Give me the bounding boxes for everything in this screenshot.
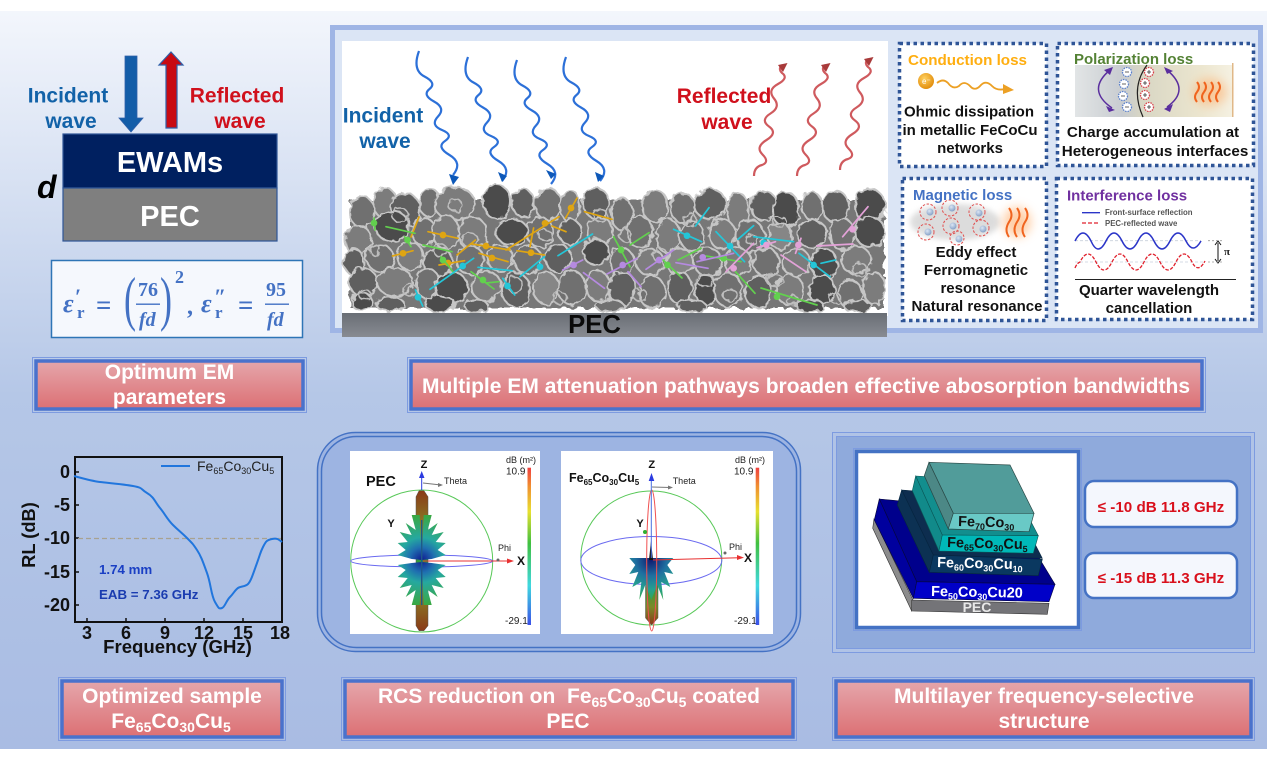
arrow: incident xyxy=(119,56,143,132)
multilayer image: 30 xyxy=(993,543,1003,553)
Fe50 layer xyxy=(874,499,1055,602)
Fe70 layer xyxy=(924,462,1034,532)
x axis labels: 18 xyxy=(270,623,290,643)
section title: RCS reduction: 5 xyxy=(679,694,687,710)
multilayer image: Co xyxy=(985,515,1005,531)
section title: multilayer structure: Multilayer frequency-selective xyxy=(894,685,1194,708)
box: conduction loss: networks xyxy=(937,140,1003,157)
box: magnetic loss: Ferromagnetic xyxy=(924,262,1028,279)
box: conduction loss: in metallic FeCoCu xyxy=(902,122,1038,139)
callout: -15 dB bandwidth xyxy=(1085,553,1237,598)
formula box: 2 xyxy=(175,267,184,287)
RCS plot: PEC xyxy=(350,451,540,634)
multilayer image: Cu xyxy=(993,556,1013,573)
section title: optimized sample: Optimized sample xyxy=(82,685,262,708)
section title: RCS reduction xyxy=(342,678,796,740)
box: interference loss: Quarter wavelength xyxy=(1079,282,1219,299)
multilayer image: 30 xyxy=(1004,522,1014,532)
RCS plot: coated: X xyxy=(744,551,752,565)
RCS plot: coated xyxy=(561,451,773,634)
section title: optimized sample: Fe xyxy=(111,710,231,735)
RCS plot: coated: -29.1 xyxy=(734,616,757,627)
formula box: r xyxy=(215,303,223,322)
section title: RCS reduction: 65 xyxy=(592,694,607,710)
box: interference loss: cancellation xyxy=(1106,300,1192,317)
layer: PEC xyxy=(63,188,277,241)
section title: RCS reduction: 30 xyxy=(635,694,651,710)
panel: multilayer structure xyxy=(832,432,1254,652)
panel: attenuation pathways xyxy=(332,28,1260,339)
section title: optimized sample: 65 xyxy=(136,719,152,735)
label: incident wave: Incident xyxy=(28,84,108,108)
y axis title: RL (dB) xyxy=(18,502,39,568)
EWAMs text: EWAMs xyxy=(117,147,223,179)
formula box: r xyxy=(77,303,85,322)
formula box: = xyxy=(238,290,253,320)
thickness note: 1.74 mm xyxy=(99,562,152,577)
section title: RCS reduction: RCS reduction on Fe xyxy=(378,685,760,710)
RCS plot: PEC: -29.1 xyxy=(505,616,528,627)
threshold line xyxy=(78,538,281,540)
callout: -10 dB bandwidth xyxy=(1085,481,1237,527)
legend: 30 xyxy=(241,466,251,476)
legend: Co xyxy=(223,458,241,474)
legend xyxy=(1082,208,1193,228)
section title: RCS reduction: PEC xyxy=(546,710,590,733)
label: reflected wave: wave xyxy=(213,110,266,133)
RCS plot: PEC: dB (m²) xyxy=(506,455,536,465)
x axis labels: 6 xyxy=(121,623,131,643)
label: incident wave: wave xyxy=(44,110,97,133)
legend: PEC-reflected wave xyxy=(1105,219,1178,228)
x axis labels: 15 xyxy=(233,623,253,643)
RCS plot: coated: 65 xyxy=(584,478,593,487)
RCS plot: coated: Y xyxy=(636,518,644,530)
x axis labels: 3 xyxy=(82,623,92,643)
label: incident wave: Incident xyxy=(343,104,423,128)
legend: 65 xyxy=(213,466,223,476)
RCS plot: coated: Phi xyxy=(729,542,742,552)
y axis labels: -5 xyxy=(54,495,70,515)
interference waves xyxy=(1075,233,1236,280)
x axis labels: 12 xyxy=(194,623,214,643)
multilayer image: Cu xyxy=(1003,536,1023,553)
label: reflected wave: wave xyxy=(700,111,753,134)
legend: Fe xyxy=(197,458,213,474)
section title: optimized sample: 30 xyxy=(179,719,195,735)
box: interference loss: π xyxy=(1224,246,1230,258)
box: polarization loss: Heterogeneous interfaces xyxy=(1062,143,1248,160)
RCS plot: coated: 30 xyxy=(609,478,619,487)
y axis labels: -10 xyxy=(44,528,70,548)
icon: electron wave xyxy=(918,73,1014,94)
layer: EWAMs xyxy=(63,134,277,188)
EAB note: EAB = 7.36 GHz xyxy=(99,587,199,602)
multilayer image: 10 xyxy=(1012,564,1023,574)
formula box: fd xyxy=(267,309,285,331)
formula box: , xyxy=(187,294,193,320)
magnetic image xyxy=(910,200,1031,245)
polarization image xyxy=(1075,63,1234,117)
RCS plot: coated: Fe xyxy=(569,471,584,485)
section title: RCS reduction: Co xyxy=(607,685,635,708)
chart: reflection loss xyxy=(18,457,290,657)
multilayer image: Co xyxy=(974,536,994,552)
multilayer image: Fe xyxy=(931,584,948,600)
multilayer image: 30 xyxy=(977,592,987,602)
box: interference loss xyxy=(1056,178,1252,320)
section title: multiple EM attenuation pathways xyxy=(408,358,1206,412)
y axis labels: -20 xyxy=(44,595,70,615)
RL curve xyxy=(74,476,282,608)
magnetic and conductive rods xyxy=(372,198,868,306)
y axis labels: 0 xyxy=(60,462,70,482)
formula box: 95 xyxy=(266,279,286,301)
thickness label d: d xyxy=(37,169,58,205)
white scene background xyxy=(342,41,888,316)
formula box: ( xyxy=(124,266,136,332)
box: magnetic loss xyxy=(902,178,1046,320)
section title: RCS reduction: coated xyxy=(686,685,760,708)
legend xyxy=(161,458,274,476)
box: polarization loss xyxy=(1058,44,1254,166)
label: reflected wave: Reflected xyxy=(190,84,284,108)
RCS plot: coated: Theta xyxy=(673,476,696,486)
multilayer image: Co xyxy=(964,556,984,572)
RCS plot: PEC: Z xyxy=(421,459,428,471)
section title: optimum EM parameters: parameters xyxy=(113,386,226,409)
multilayer image: 60 xyxy=(954,562,964,573)
multilayer image xyxy=(854,448,1082,630)
RCS plot: PEC: Theta xyxy=(444,476,467,486)
RCS plot: PEC: Phi xyxy=(498,543,511,553)
section title: RCS reduction: Cu xyxy=(651,685,679,708)
formula box: ) xyxy=(160,266,172,332)
multilayer image: 30 xyxy=(983,563,993,573)
formula box: 76 xyxy=(138,279,158,301)
RCS plot: PEC: PEC xyxy=(366,474,396,490)
multilayer image: Cu20 xyxy=(987,585,1023,602)
multilayer image: Fe xyxy=(937,555,954,571)
panel: RCS simulation xyxy=(318,432,800,652)
multilayer image: Fe xyxy=(958,514,975,530)
label: reflected wave: Reflected xyxy=(677,85,771,108)
callout: -15 dB bandwidth: ≤ -15 dB 11.3 GHz xyxy=(1098,570,1225,587)
Fe60 layer xyxy=(897,490,1042,576)
box: conduction loss: Conduction loss xyxy=(908,52,1027,69)
section title: optimized sample xyxy=(58,678,286,740)
RCS plot: PEC: Y xyxy=(387,518,395,530)
multilayer image: PEC xyxy=(963,599,991,615)
RCS plot: coated: Co xyxy=(592,471,610,485)
reflected wave squiggles xyxy=(754,57,874,176)
RCS plot: coated: 10.9 xyxy=(734,466,754,477)
RCS plot: PEC: X xyxy=(517,554,525,568)
legend: 5 xyxy=(269,466,274,476)
RCS plot: PEC: 10.9 xyxy=(506,466,526,477)
PEC label: PEC xyxy=(568,311,621,339)
icon: electron wave: e⁻ xyxy=(922,77,931,86)
multilayer image: 65 xyxy=(964,542,974,553)
formula box: ″ xyxy=(214,284,226,309)
formula box: ′ xyxy=(75,284,81,309)
section title: multiple EM attenuation pathways: Multiple EM attenuation pathways broaden effective abosorption bandwidths xyxy=(422,375,1190,398)
multilayer image: Fe xyxy=(947,535,964,551)
PEC layer xyxy=(873,519,1049,614)
incident wave squiggles xyxy=(416,51,604,185)
box: magnetic loss: Eddy effect xyxy=(936,244,1016,261)
multilayer image: 5 xyxy=(1022,544,1028,554)
box: polarization loss: Charge accumulation at xyxy=(1067,124,1239,141)
callout: -10 dB bandwidth: ≤ -10 dB 11.8 GHz xyxy=(1098,499,1225,516)
multilayer image: 70 xyxy=(975,521,985,532)
section title: optimum EM parameters: Optimum EM xyxy=(105,361,234,384)
multilayer image: 50 xyxy=(948,591,958,601)
y axis labels: -15 xyxy=(44,562,70,582)
legend: Front-surface reflection xyxy=(1105,208,1193,217)
box: interference loss: Interference loss xyxy=(1067,188,1187,205)
formula box: = xyxy=(96,290,111,320)
PEC text: PEC xyxy=(140,201,200,233)
RCS plot: coated: Z xyxy=(648,459,655,471)
box: magnetic loss: Magnetic loss xyxy=(913,187,1012,204)
section title: optimized sample: Cu xyxy=(195,710,223,733)
box: conduction loss: Ohmic dissipation xyxy=(904,104,1034,121)
RCS plot: coated: 5 xyxy=(635,478,640,487)
section title: optimum EM parameters xyxy=(32,358,306,412)
box: magnetic loss: resonance xyxy=(940,280,1016,297)
section title: multilayer structure: structure xyxy=(998,710,1090,733)
absorber particles xyxy=(344,185,885,312)
panel frame xyxy=(332,28,1260,330)
box: conduction loss xyxy=(900,44,1046,166)
RCS plot: coated: Cu xyxy=(618,471,635,485)
formula box: ε xyxy=(63,289,74,318)
panel: optimum EM parameters schematic xyxy=(28,52,284,241)
formula box: ε xyxy=(201,289,212,318)
Fe65 layer xyxy=(912,476,1038,553)
RCS plot: coated: dB (m²) xyxy=(735,455,765,465)
box: polarization loss: Polarization loss xyxy=(1074,51,1193,68)
PEC plate xyxy=(342,313,887,337)
arrow: reflected xyxy=(159,52,183,128)
section title: optimized sample: Co xyxy=(151,710,179,733)
x axis labels: 9 xyxy=(160,623,170,643)
formula box: fd xyxy=(139,309,157,331)
x axis title: Frequency (GHz) xyxy=(103,636,252,657)
label: incident wave: wave xyxy=(358,130,411,153)
legend: Cu xyxy=(251,458,269,474)
formula box xyxy=(52,260,302,338)
section title: optimized sample: 5 xyxy=(223,719,231,735)
multilayer image: Co xyxy=(958,584,978,601)
box: magnetic loss: Natural resonance xyxy=(912,298,1042,315)
section title: multilayer structure xyxy=(832,678,1254,740)
